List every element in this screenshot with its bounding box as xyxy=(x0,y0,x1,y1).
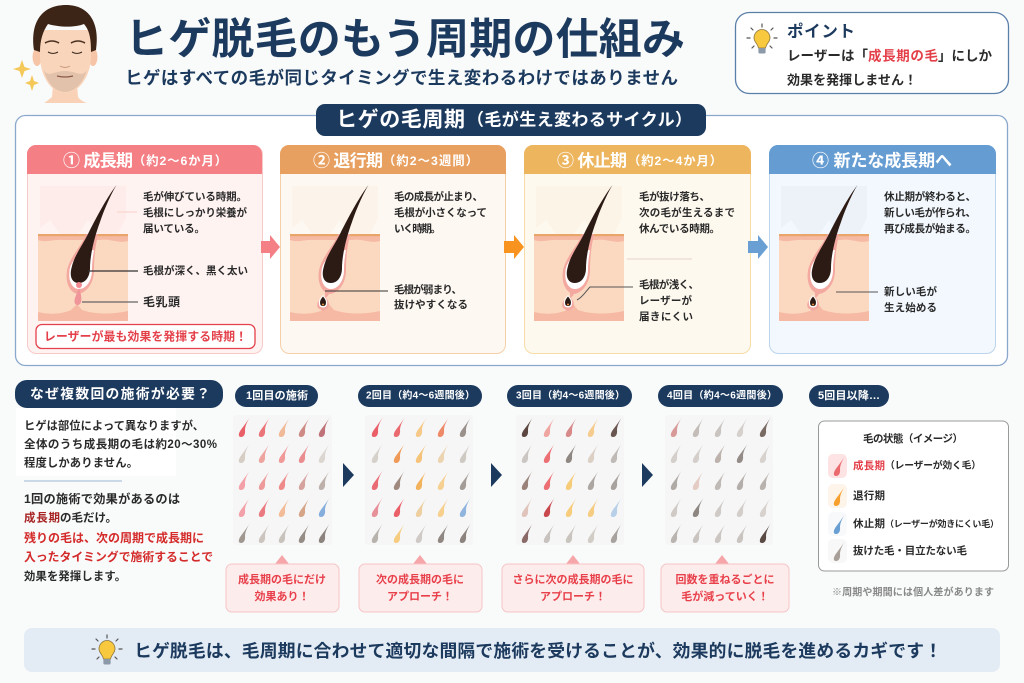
label: session 5 onward: 5回目以降… xyxy=(818,388,880,402)
panel: why multiple sessions: ヒゲは部位によって異なりますが、 xyxy=(24,418,204,432)
panel: why multiple sessions: 成長期 xyxy=(24,510,60,524)
panel: regression phase xyxy=(280,145,506,354)
subtitle: ヒゲはすべての毛が同じタイミングで生え変わるわけではありません xyxy=(125,68,678,88)
icon: smiling man's face xyxy=(13,5,98,103)
arrow: session 3 to 4 xyxy=(642,463,653,487)
panel: new growth phase: 休止期が終わると、 xyxy=(884,190,976,203)
panel: regression phase: （約2〜3週間） xyxy=(383,153,478,168)
panel: why multiple sessions xyxy=(15,380,223,583)
panel: resting phase: 休んでいる時期。 xyxy=(639,222,720,235)
panel: growth phase: （約2〜6か月） xyxy=(133,153,227,168)
panel: why multiple sessions: 入ったタイミングで施術することで xyxy=(24,550,213,564)
chart: hair grid session 2 xyxy=(365,415,473,545)
panel: resting phase xyxy=(524,145,751,354)
label: session 1: 1回目の施術 xyxy=(246,388,308,402)
panel: resting phase: （約2〜4か月） xyxy=(628,153,722,168)
panel: growth phase: 毛根にしっかり栄養が xyxy=(143,206,248,219)
panel: why multiple sessions: 全体のうち成長期の毛は約20〜30% xyxy=(24,437,217,451)
arrow: growth to regression xyxy=(261,235,280,259)
callout: session 1 xyxy=(226,555,339,612)
panel: regression phase: 毛根が小さくなって xyxy=(394,206,487,219)
callout: session 4: 毛が減っていく！ xyxy=(681,589,769,603)
footer callout xyxy=(24,628,1000,672)
panel: regression phase: 抜けやすくなる xyxy=(394,298,468,311)
callout: best timing for laser xyxy=(36,324,255,348)
callout: point box: 成長期の毛 xyxy=(868,48,938,64)
panel: new growth phase xyxy=(769,145,996,354)
panel: hair cycle xyxy=(16,104,1008,366)
panel: regression phase: 毛根が弱まり、 xyxy=(394,283,462,296)
panel: regression phase: ② 退行期 xyxy=(313,152,383,170)
callout: point box: レーザーは「 xyxy=(787,48,868,64)
label: session 5 onward xyxy=(809,385,889,407)
panel: resting phase: 毛が抜け落ち、 xyxy=(639,190,710,203)
panel: resting phase: ③ 休止期 xyxy=(557,152,627,170)
panel: resting phase: 次の毛が生えるまで xyxy=(639,206,735,219)
label: session 2: 2回目（約4〜6週間後） xyxy=(366,388,475,402)
panel: why multiple sessions: 残りの毛は、次の周期で成長期に xyxy=(24,530,204,545)
panel: growth phase: 毛根が深く、黒く太い xyxy=(143,264,248,277)
panel: new growth phase: 再び成長が始まる。 xyxy=(884,222,976,235)
callout: session 1: 効果あり！ xyxy=(254,590,310,603)
panel: new growth phase: 新しい毛が作られ、 xyxy=(884,206,976,219)
heading: why multiple sessions xyxy=(15,380,223,408)
callout: point box xyxy=(736,12,1008,94)
callout: session 2 xyxy=(359,555,482,612)
heading: hair cycle xyxy=(316,104,706,136)
panel: why multiple sessions: 効果を発揮します。 xyxy=(24,569,126,583)
panel: growth phase: 毛が伸びている時期。 xyxy=(143,190,247,203)
heading: hair cycle: （毛が生え変わるサイクル） xyxy=(467,110,692,130)
legend: hair states: （レーザーが効きにくい毛） xyxy=(885,518,999,529)
panel: growth phase xyxy=(27,145,262,354)
label: session 1 xyxy=(235,385,318,407)
label: session 4: 4回目（約4〜6週間後） xyxy=(667,388,777,402)
arrow: session 2 to 3 xyxy=(491,463,502,487)
callout: point box: 」にしか xyxy=(938,48,992,64)
legend: hair states: 成長期 xyxy=(853,459,885,472)
chart: hair grid session 4 xyxy=(665,415,773,545)
arrow: resting to new growth xyxy=(748,235,768,259)
legend: hair states: （レーザーが効く毛） xyxy=(885,458,981,472)
legend: hair states: 退行期 xyxy=(853,489,885,502)
panel: growth phase: 毛乳頭 xyxy=(143,294,180,309)
footer callout: ヒゲ脱毛は、毛周期に合わせて適切な間隔で施術を受けることが、効果的に脱毛を進めるカギです！ xyxy=(134,640,942,661)
panel: resting phase: レーザーが xyxy=(639,294,692,307)
arrow: session 1 to 2 xyxy=(343,463,354,487)
heading: why multiple sessions: なぜ複数回の施術が必要？ xyxy=(30,386,210,402)
heading: hair cycle: ヒゲの毛周期 xyxy=(336,108,465,132)
label: session 4 xyxy=(658,385,783,407)
callout: session 4 xyxy=(661,555,789,612)
callout: session 3: さらに次の成長期の毛に xyxy=(512,572,634,586)
panel: why multiple sessions: 程度しかありません。 xyxy=(24,456,138,470)
panel: regression phase: いく時期。 xyxy=(394,222,441,235)
panel: new growth phase: 新しい毛が xyxy=(884,285,938,298)
legend: hair states: 抜けた毛・目立たない毛 xyxy=(853,544,968,557)
panel: new growth phase: ④ 新たな成長期へ xyxy=(812,150,952,170)
panel: new growth phase: 生え始める xyxy=(884,301,937,314)
panel: resting phase: 毛根が浅く、 xyxy=(639,278,699,291)
panel: why multiple sessions: 1回の施術で効果があるのは xyxy=(24,491,180,506)
callout: session 2: アプローチ！ xyxy=(387,590,453,603)
panel: growth phase: 届いている。 xyxy=(143,223,205,235)
panel: growth phase: ① 成長期 xyxy=(63,150,133,170)
title: ヒゲ脱毛のもう周期の仕組み xyxy=(125,16,685,64)
callout: point box: ポイント xyxy=(787,21,855,41)
panel: why multiple sessions: の毛だけ。 xyxy=(60,510,117,524)
legend: hair states: 毛の状態（イメージ） xyxy=(863,432,963,445)
label: session 3 xyxy=(507,385,632,407)
panel: regression phase: 毛の成長が止まり、 xyxy=(394,190,483,203)
chart: hair grid session 1 xyxy=(233,415,332,545)
legend: hair states: 休止期 xyxy=(853,517,885,530)
callout: point box: 効果を発揮しません！ xyxy=(787,72,917,88)
label: session 2 xyxy=(358,385,482,407)
panel: resting phase: 届きにくい xyxy=(639,311,693,323)
callout: best timing for laser: レーザーが最も効果を発揮する時期！ xyxy=(44,330,247,344)
legend: hair states xyxy=(818,421,1008,571)
callout: session 1: 成長期の毛にだけ xyxy=(238,572,326,586)
arrow: regression to resting xyxy=(504,235,524,259)
label: session 3: 3回目（約4〜6週間後） xyxy=(516,388,625,402)
chart: hair grid session 3 xyxy=(516,415,624,545)
note: individual differences: ※周期や期間には個人差があります xyxy=(832,586,994,598)
callout: session 4: 回数を重ねるごとに xyxy=(676,572,774,586)
callout: session 2: 次の成長期の毛に xyxy=(376,572,464,586)
callout: session 3 xyxy=(502,555,644,612)
callout: session 3: アプローチ！ xyxy=(540,590,606,603)
